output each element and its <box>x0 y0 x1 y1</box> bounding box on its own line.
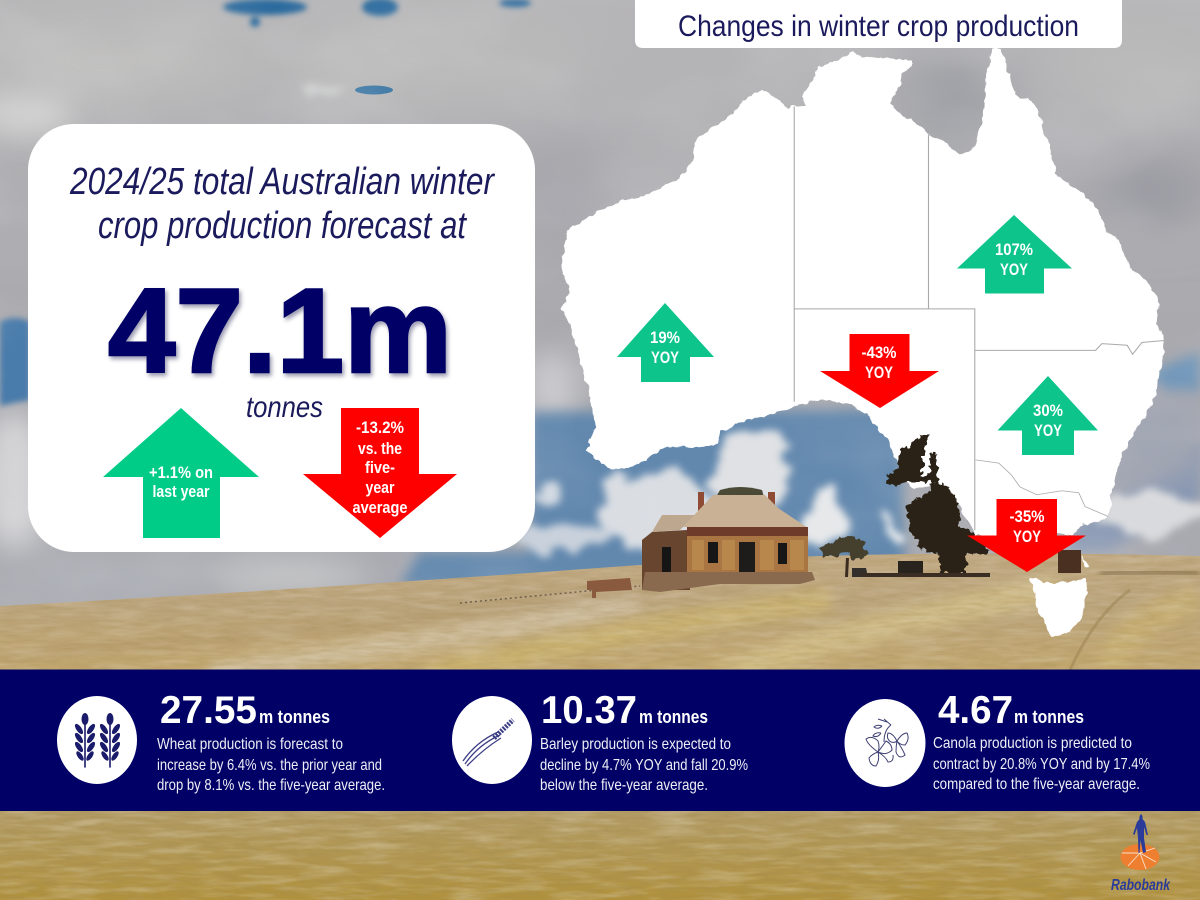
arrow: New South Wales up 30%: YOY <box>1034 421 1063 440</box>
sheds and farm machinery <box>860 550 1081 577</box>
arrow: New South Wales up 30% <box>998 376 1098 455</box>
arrow: Victoria down 35%: YOY <box>1013 527 1042 546</box>
arrow: down on five-year average: vs. the <box>358 439 402 458</box>
white cumulus clouds <box>305 79 1200 553</box>
small tree <box>820 537 868 577</box>
canola description <box>933 735 1150 793</box>
arrow: South Australia down 43%: YOY <box>865 363 894 382</box>
navy banner: crop breakdown <box>0 670 1200 811</box>
arrow: New South Wales up 30%: 30% <box>1033 401 1063 420</box>
barley description <box>540 736 748 794</box>
canola description: compared to the five-year average. <box>933 776 1140 793</box>
icon: wheat ears <box>57 696 137 784</box>
panel heading: crop production forecast at <box>98 205 467 247</box>
arrow: down on five-year average: five- <box>365 458 395 477</box>
arrow: Victoria down 35% <box>967 499 1086 572</box>
barley tonnage: m tonnes <box>639 707 708 727</box>
wheat description: drop by 8.1% vs. the five-year average. <box>157 777 385 794</box>
arrow: up on last year: +1.1% on <box>149 463 213 482</box>
barley block <box>452 689 748 794</box>
blue sky patches <box>0 0 1200 590</box>
unit label: tonnes <box>246 391 323 424</box>
Rabobank logo: Rabobank <box>1111 877 1171 894</box>
headline figure: 47.1m <box>108 264 452 398</box>
large gum tree <box>887 434 990 573</box>
farmhouse, trees and outbuildings in the photo <box>587 434 1081 598</box>
arrow: South Australia down 43% <box>820 334 939 408</box>
wheat tonnage: 27.55 <box>160 689 257 732</box>
arrow: Queensland up 107%: YOY <box>1000 260 1029 279</box>
mainland and Tasmania outline <box>561 49 1164 638</box>
canola tonnage <box>938 689 1084 732</box>
title box: changes in winter crop production: Changes in winter crop production <box>678 10 1079 43</box>
wheat tonnage: m tonnes <box>259 707 330 727</box>
background photo: cloudy sky and harvested field <box>0 0 1200 675</box>
wheat description: increase by 6.4% vs. the prior year and <box>157 757 382 774</box>
wheat description <box>157 736 385 794</box>
arrow: up on last year <box>103 408 259 538</box>
barley description: decline by 4.7% YOY and fall 20.9% <box>540 757 748 774</box>
barley tonnage: 10.37 <box>541 689 637 732</box>
arrow: South Australia down 43%: -43% <box>862 343 896 362</box>
arrow: down on five-year average: year <box>366 478 395 497</box>
panel heading: 2024/25 total Australian winter <box>69 161 495 203</box>
icon: barley stalk <box>452 696 532 784</box>
arrow: Queensland up 107% <box>957 215 1072 294</box>
bottom wheat field strip <box>0 811 1200 900</box>
barley description: Barley production is expected to <box>540 736 731 753</box>
wheat tonnage <box>160 689 330 732</box>
panel heading <box>69 161 495 247</box>
arrow: Western Australia up 19%: 19% <box>650 328 680 347</box>
canola block <box>844 689 1150 793</box>
canola description: Canola production is predicted to <box>933 735 1132 752</box>
wheat description: Wheat production is forecast to <box>157 736 343 753</box>
arrow: down on five-year average: -13.2% <box>356 418 404 437</box>
arrow: Victoria down 35%: -35% <box>1010 507 1044 526</box>
arrow: Western Australia up 19% <box>617 303 714 382</box>
Rabobank logo <box>1111 814 1171 894</box>
arrow: down on five-year average: average <box>352 498 408 517</box>
title box: changes in winter crop production <box>635 0 1122 48</box>
barley description: below the five-year average. <box>540 777 708 794</box>
canola tonnage: 4.67 <box>938 689 1013 732</box>
barley tonnage <box>541 689 708 732</box>
canola description: contract by 20.8% YOY and by 17.4% <box>933 756 1150 773</box>
map of Australia with state borders <box>561 49 1164 638</box>
arrow: down on five-year average <box>303 408 457 538</box>
arrow: Western Australia up 19%: YOY <box>651 348 680 367</box>
wheat block <box>57 689 385 794</box>
canola tonnage: m tonnes <box>1014 707 1084 727</box>
house <box>587 487 815 598</box>
icon: canola flowers <box>844 699 926 787</box>
arrow: Queensland up 107%: 107% <box>995 240 1033 259</box>
main forecast panel <box>28 124 535 552</box>
arrow: up on last year: last year <box>152 482 210 501</box>
